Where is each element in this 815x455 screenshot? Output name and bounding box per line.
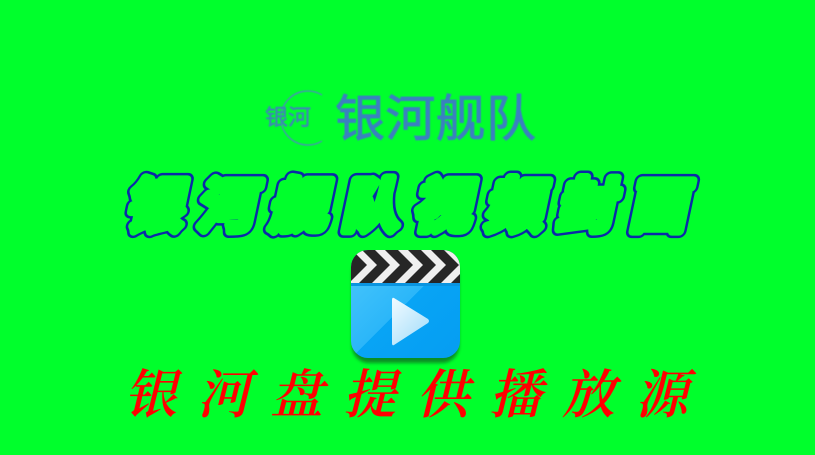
logo wordmark: 银河舰队 (335, 91, 536, 147)
clapper stripes (349, 250, 469, 286)
icon body (351, 250, 460, 358)
icon shadow (352, 256, 459, 363)
logo emblem (265, 91, 322, 145)
logo (265, 91, 536, 147)
logo emblem: 银河 (265, 105, 311, 130)
icon: video clapperboard with play button (349, 250, 469, 363)
title: hollow outlined heading: 银河舰队视频封面 (122, 176, 697, 239)
subtitle: red brush text: 银河盘提供播放源 (121, 366, 702, 425)
play triangle (392, 298, 429, 345)
title: hollow outlined heading: 银河舰队视频封面 (122, 176, 697, 239)
